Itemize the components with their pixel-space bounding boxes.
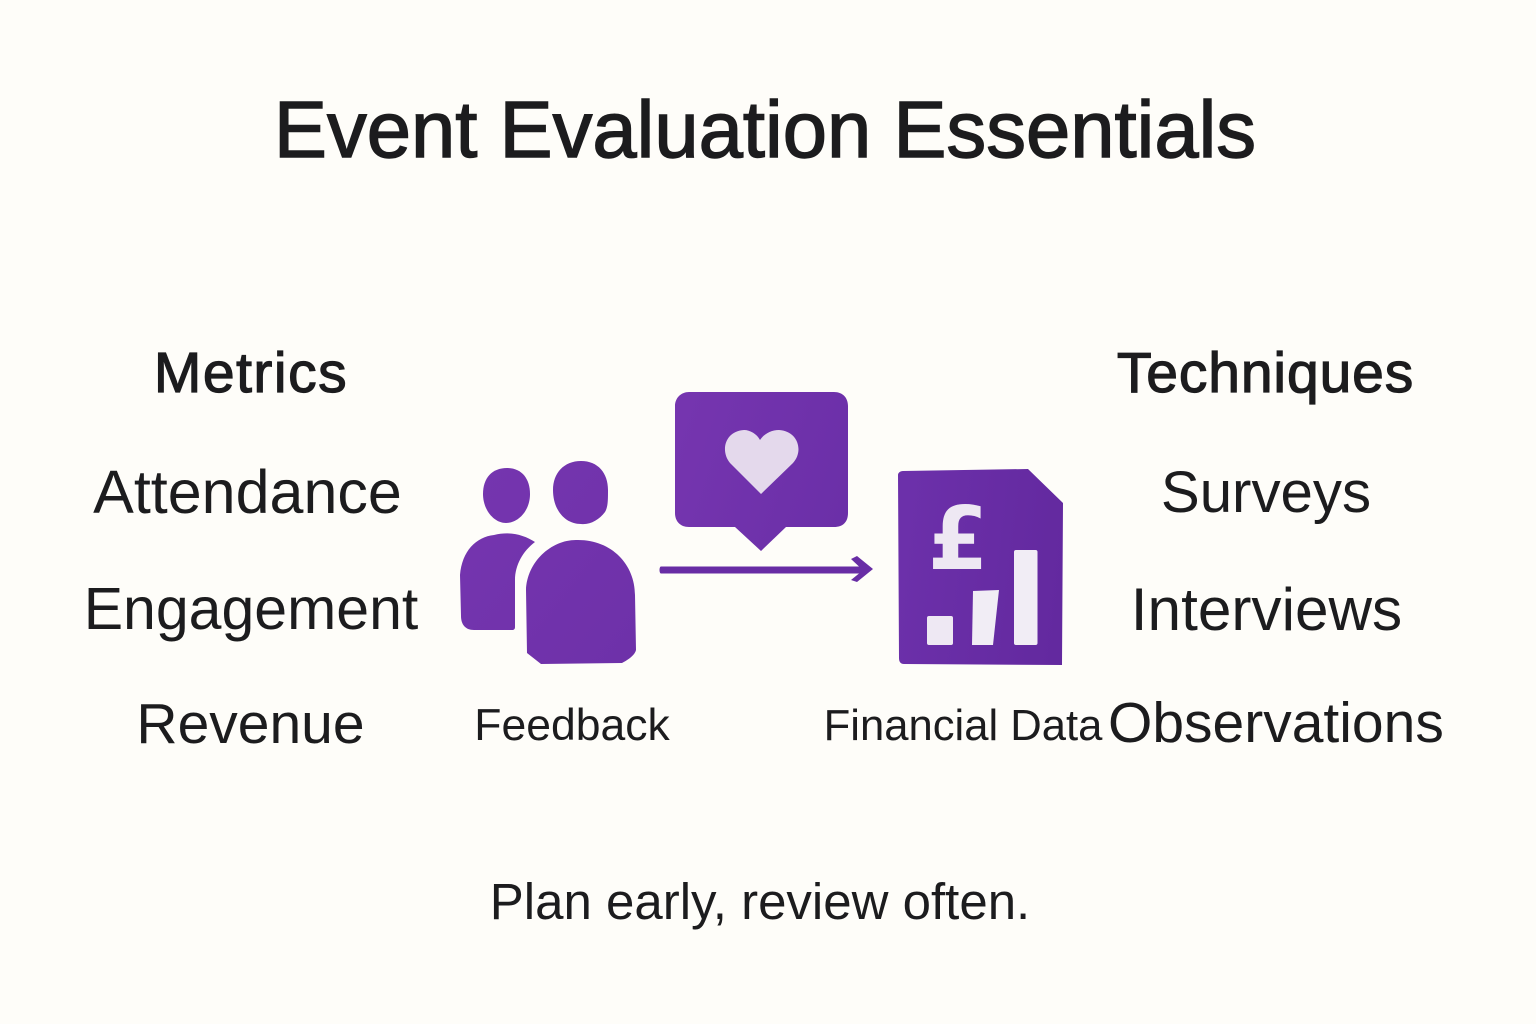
icon: speech bubble with heart	[675, 392, 848, 551]
text: attendance: Attendance	[93, 458, 402, 526]
icon: financial document	[898, 469, 1063, 665]
text: surveys: Surveys	[1161, 460, 1371, 525]
arrow	[660, 556, 873, 582]
text: revenue: Revenue	[136, 692, 365, 756]
panel: techniques	[1108, 341, 1444, 755]
heading: metrics: Metrics	[154, 341, 348, 405]
icon: people	[460, 461, 636, 664]
icon: financial document: £	[928, 488, 988, 590]
label: financial data: Financial Data	[824, 702, 1102, 750]
text: observations: Observations	[1108, 691, 1444, 755]
text: interviews: Interviews	[1131, 575, 1402, 643]
tagline: Plan early, review often.	[490, 873, 1030, 930]
heading: techniques: Techniques	[1117, 341, 1414, 405]
title: Event Evaluation Essentials	[274, 85, 1256, 174]
label: feedback: Feedback	[474, 701, 670, 750]
text: engagement: Engagement	[84, 576, 418, 642]
panel: metrics	[84, 341, 418, 756]
